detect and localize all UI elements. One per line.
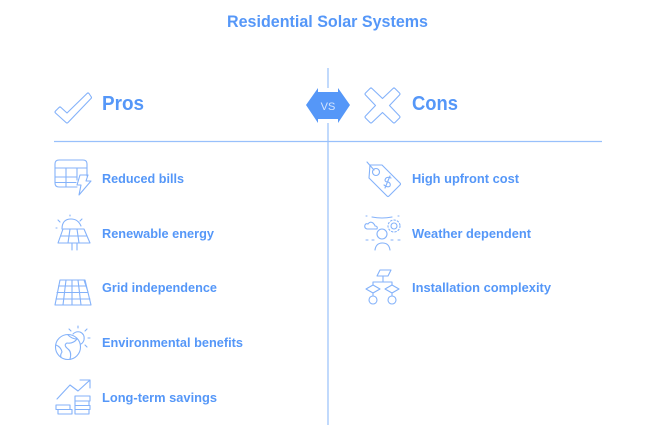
icon: growth arrow and coins xyxy=(56,380,90,414)
icon: globe and sun xyxy=(56,326,90,360)
title: Residential Solar Systems xyxy=(227,12,428,31)
icon: bill with lightning xyxy=(55,160,91,195)
icon: flow chart xyxy=(366,270,399,304)
item: environmental benefits: Environmental benefits xyxy=(102,335,243,350)
cons list xyxy=(365,162,552,304)
item: installation complexity: Installation complexity xyxy=(412,280,552,295)
heading: cons: Cons xyxy=(412,93,458,115)
item: grid independence: Grid independence xyxy=(102,280,217,295)
item: weather dependent: Weather dependent xyxy=(412,226,532,241)
vs badge xyxy=(306,88,350,123)
vertical divider xyxy=(327,68,329,425)
heading: pros: Pros xyxy=(102,93,144,115)
icon: solar panel with sun xyxy=(56,215,90,250)
pros list xyxy=(55,160,243,414)
icon: person under weather xyxy=(365,216,400,250)
icon: price tag xyxy=(367,162,400,196)
icon: check mark xyxy=(55,93,92,123)
item: reduced bills: Reduced bills xyxy=(102,171,184,186)
item: long-term savings: Long-term savings xyxy=(102,390,217,405)
icon: grid solar panel xyxy=(55,280,91,305)
item: renewable energy: Renewable energy xyxy=(102,226,215,241)
horizontal divider xyxy=(54,140,602,142)
vs badge: VS xyxy=(321,101,335,113)
icon: cross mark xyxy=(365,88,400,123)
item: high upfront cost: High upfront cost xyxy=(412,171,520,186)
